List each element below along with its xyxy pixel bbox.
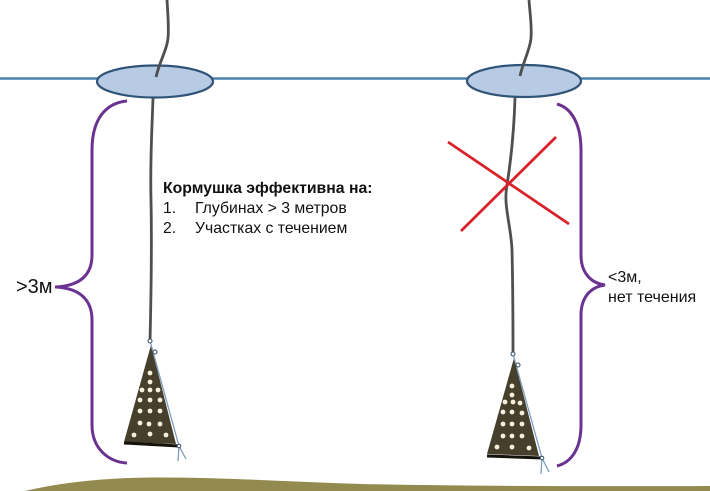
water surface line	[0, 77, 710, 80]
right feeder icon	[487, 352, 549, 474]
depth label: less than 3 m, no current: нет течения	[608, 289, 696, 306]
list item 1: 1.	[163, 200, 176, 217]
heading: Кормушка эффективна на:	[163, 180, 373, 197]
right fishing hole and line	[467, 0, 581, 354]
riverbed ground	[25, 477, 710, 491]
list item 2: Участках с течением	[195, 220, 347, 237]
red cross	[448, 137, 569, 231]
list item 1: Глубинах > 3 метров	[195, 200, 347, 217]
depth label: greater than 3 m: >3м	[16, 276, 53, 298]
list item 2: 2.	[163, 220, 176, 237]
right depth brace	[557, 104, 605, 466]
left feeder icon	[124, 339, 186, 461]
depth label: less than 3 m, no current: <3м,	[608, 269, 642, 286]
text block: feeder effectiveness conditions	[163, 180, 373, 237]
left depth brace	[55, 101, 127, 463]
left fishing hole and line	[97, 0, 213, 341]
